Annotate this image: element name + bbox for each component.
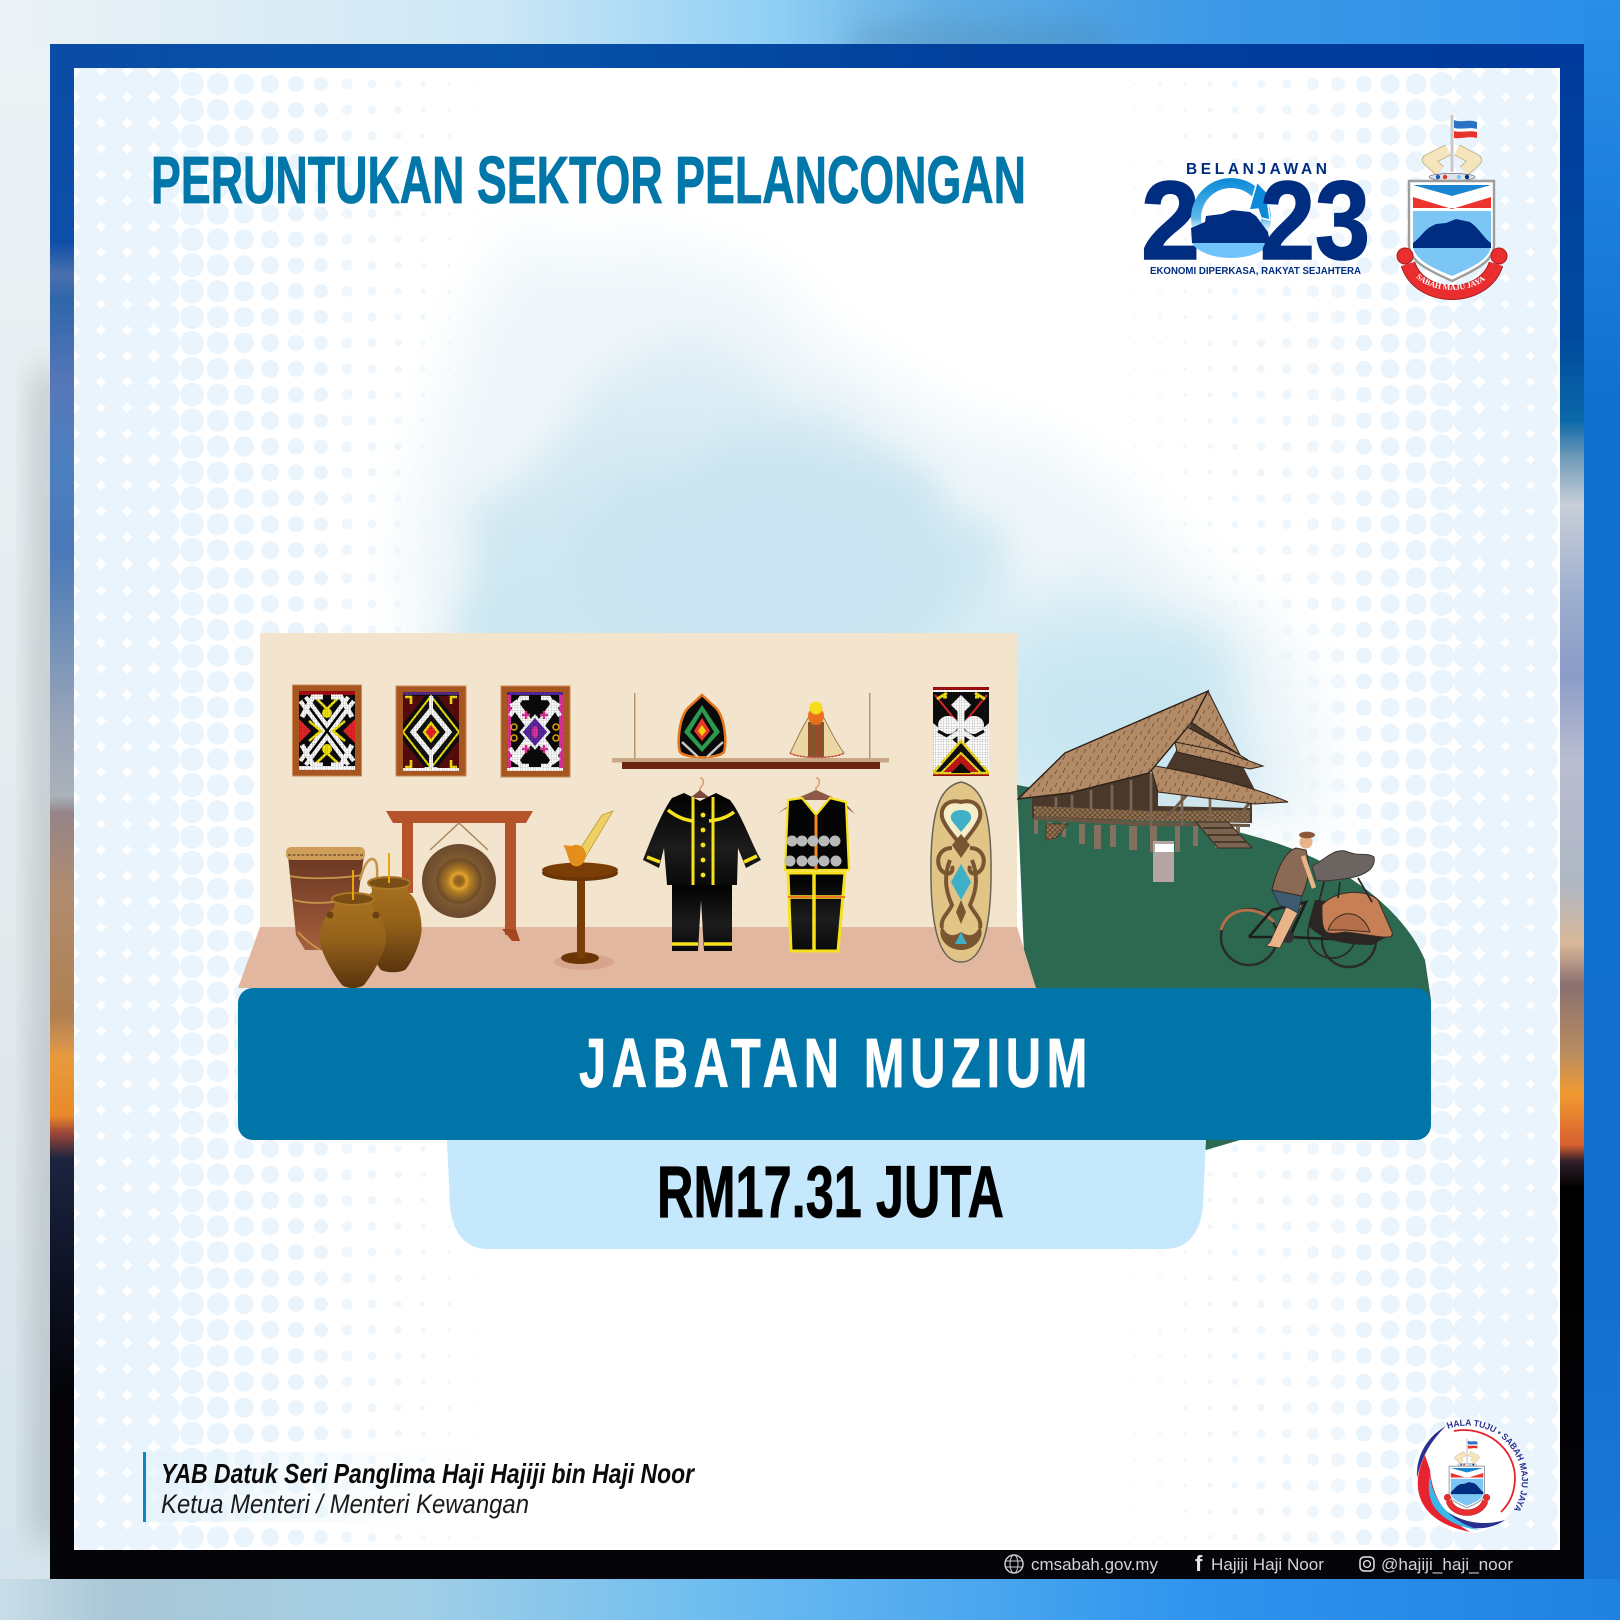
side table with sape: [542, 811, 618, 970]
signboard: [1153, 841, 1174, 882]
woven hanging: [933, 687, 989, 776]
shelf: [612, 693, 889, 769]
carved shield: [931, 782, 991, 962]
attribution: [143, 1452, 696, 1522]
hat: conical headdress: [790, 702, 844, 758]
man's costume on hanger: [643, 778, 761, 951]
footer: instagram: @hajiji_haji_noor: [1381, 1555, 1513, 1574]
woman's costume on hanger: [777, 778, 855, 951]
watercolor cloud: [400, 255, 1320, 820]
amount: RM17.31 JUTA: [657, 1152, 1004, 1233]
floor: [238, 927, 1036, 988]
footer: website: cmsabah.gov.my: [1031, 1555, 1158, 1574]
gong: [422, 823, 496, 918]
jar front: [320, 870, 386, 988]
trishaw with rider: [1221, 832, 1392, 967]
footer: facebook: Hajiji Haji Noor: [1211, 1555, 1324, 1574]
logo: Belanjawan 2023: 23: [1260, 159, 1370, 283]
logo: Belanjawan 2023: EKONOMI DIPERKASA, RAKYAT SEJAHTERA: [1150, 265, 1361, 277]
footer: facebook: f: [1195, 1551, 1203, 1576]
gong stand: [386, 811, 533, 941]
traditional longhouse: [1018, 691, 1288, 852]
rattan basket: [286, 847, 377, 950]
attribution: YAB Datuk Seri Panglima Haji Hajiji bin Haji Noor: [161, 1458, 696, 1489]
woven frame 3: [501, 686, 570, 777]
attribution: Ketua Menteri / Menteri Kewangan: [161, 1489, 529, 1519]
woven frame 2: [396, 686, 466, 776]
banner: Jabatan Muzium: JABATAN MUZIUM: [579, 1024, 1093, 1102]
hill: [1017, 785, 1431, 1150]
seal: Hala Tuju Sabah Maju Jaya: HALA TUJU • SABAH MAJU JAYA: [1446, 1420, 1528, 1511]
title: PERUNTUKAN SEKTOR PELANCONGAN: [151, 143, 1026, 218]
logo: Belanjawan 2023: 2: [1141, 159, 1200, 283]
hat: beaded cap: [679, 695, 725, 757]
jar back: [364, 853, 422, 972]
logo: Belanjawan 2023: BELANJAWAN: [1186, 161, 1327, 178]
wall: [260, 633, 1017, 927]
logo: Sabah crest: SABAH MAJU JAYA: [1416, 274, 1486, 290]
banner: Jabatan Muzium: [238, 988, 1431, 1249]
logo: Sabah crest: [1396, 115, 1508, 300]
logo: Belanjawan 2023: [1141, 159, 1370, 283]
footer: facebook: [1195, 1551, 1324, 1576]
seal: Hala Tuju Sabah Maju Jaya: [1412, 1420, 1528, 1533]
woven frame 1: [292, 685, 362, 776]
